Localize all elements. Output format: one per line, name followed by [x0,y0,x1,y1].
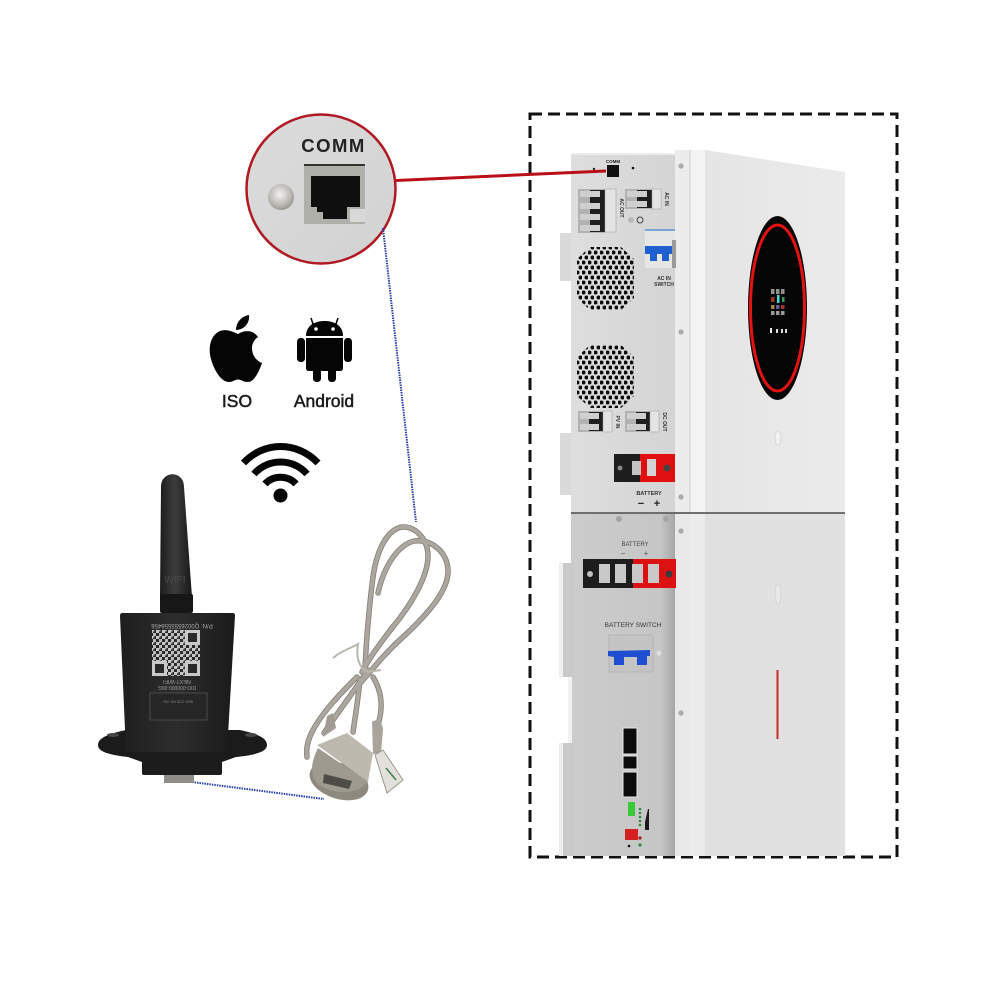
battery switch [605,622,662,672]
seam between modules [571,512,845,514]
PV in terminals [578,411,620,432]
label: Android: Android [294,391,354,411]
ground symbol [628,217,643,223]
battery terminal label [621,542,649,558]
lower fan grille [577,345,634,408]
grey cable [307,527,448,757]
QR code [152,630,200,676]
front latch upper [775,431,781,445]
model labels [158,678,196,690]
screw [268,184,294,210]
lower connector [142,760,222,783]
DB9 serial connector [310,713,373,800]
front latch lower [775,584,781,604]
cable shadow strands [307,527,448,757]
battery terminal label: + [644,549,649,558]
PV in terminals: PV IN [614,415,620,429]
battery terminal label: BATTERY [621,542,649,548]
terminal block: +5V 12V ACC GND [163,700,194,704]
AC in terminals [625,189,669,209]
AC out terminals: AC OUT [618,198,624,218]
red indicator line [776,670,778,739]
red connector line [396,171,606,180]
inverter and battery tower [559,150,845,856]
blue dotted link from module to cable [192,782,324,799]
battery lower panel [559,513,676,856]
inverter battery terminals [614,454,675,482]
comm port on inverter [593,159,634,177]
icon: apple [210,315,262,382]
COMM label: COMM [301,135,366,156]
AC out terminals [578,189,624,233]
module body [120,613,235,752]
inverter upper rear panel [560,153,676,513]
model labels: NEXT-WIFI [163,678,191,684]
blue dotted link from COMM to cable [383,228,416,522]
cable main strands [307,527,448,757]
battery switch: BATTERY SWITCH [605,622,662,629]
AC in switch: SWITCH [654,282,674,288]
RJ45 socket [304,164,365,224]
AC in terminals: AC IN [663,192,669,206]
inverter battery label: − [638,498,644,510]
inverter side and front casing [675,150,845,513]
AC in switch [645,229,676,288]
comm port on inverter: COMM [606,159,620,164]
dashed frame [530,114,897,857]
icon: android [297,318,352,382]
terminal block [150,693,207,720]
mounting flange [98,730,267,762]
antenna [160,474,193,613]
antenna: WIFI [164,575,186,586]
RJ45 plug [372,720,403,793]
display oval [748,216,807,400]
label: ISO: ISO [222,391,252,411]
battery casing [616,513,845,856]
AC in switch: AC IN [657,276,671,282]
DC out terminals: DC OUT [661,412,667,432]
inverter battery label: BATTERY [636,491,662,497]
DC out terminals [625,411,667,432]
inverter battery label [636,491,662,510]
inverter battery label: + [654,498,660,510]
cable tie [333,644,381,672]
battery terminal block [583,559,676,588]
WiFi module [98,474,267,783]
battery communication ports [623,728,649,847]
upper fan grille [577,247,634,310]
serial number: P/N: Q0026555556456 [151,622,213,628]
icon: wifi [244,446,318,502]
model labels: DIO-000000-00G [158,684,196,690]
magnified COMM port callout [246,114,396,264]
battery terminal label: − [621,549,626,558]
